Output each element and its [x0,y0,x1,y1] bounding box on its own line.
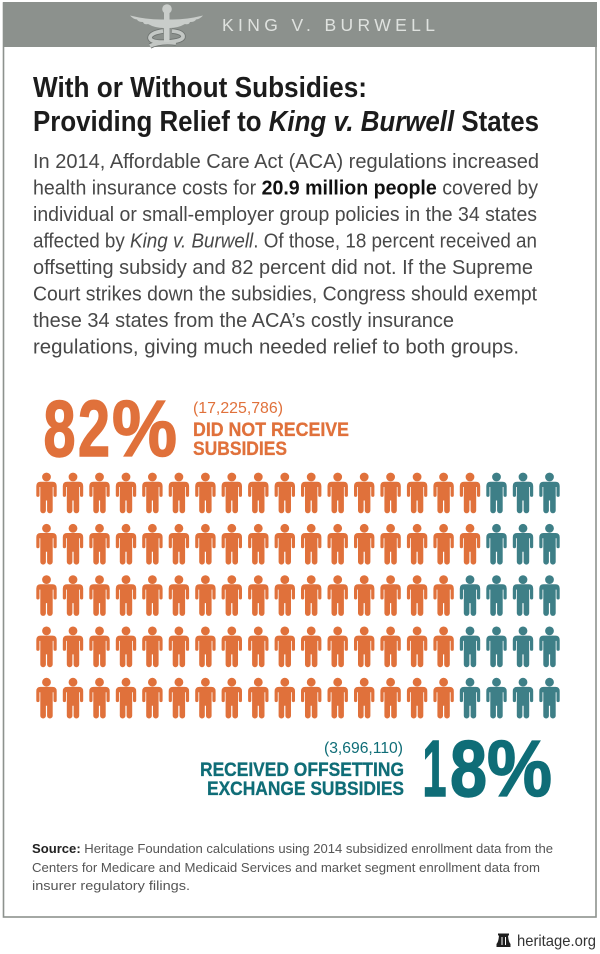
label: did not receive subsidies: SUBSIDIES [193,439,287,460]
website: heritage.org [517,933,596,950]
source note: insurer regulatory filings. [32,878,190,893]
label: received offsetting exchange subsidies [200,760,404,800]
stat: 18%: 8 [450,724,487,813]
source note: Centers for Medicare and Medicaid Services and market segment enrollment data from [32,860,540,875]
label: received offsetting exchange subsidies: EXCHANGE SUBSIDIES [207,779,404,800]
title: With or Without Subsidies: [33,72,367,104]
intro text block [33,150,539,358]
row 2 of people [36,524,560,565]
label: received offsetting exchange subsidies: RECEIVED OFFSETTING [200,760,404,781]
stat: 82%: 8 [44,384,76,473]
row 3 of people [36,575,560,616]
row 1 of people [36,473,560,513]
title: Providing Relief to King v. Burwell States [33,106,539,138]
serpent coils [150,31,183,46]
label: did not receive subsidies: DID NOT RECEIVE [193,420,349,441]
icon: liberty bell [496,934,510,947]
callout: 18 percent [200,724,552,813]
icon: caduceus [130,4,203,46]
callout: 82 percent [44,384,349,473]
stat: 82%: 2 [78,384,110,473]
footer logo [496,933,596,950]
count: 3,696,110: (3,696,110) [324,740,403,757]
stat: 82%: % [112,384,177,473]
stat: 18% [422,724,552,813]
pictogram: 100 people, 82 orange and 18 teal [36,473,560,718]
intro text block: affected by King v. Burwell. Of those, 18 percent received an [33,230,537,252]
count: 17,225,786: (17,225,786) [193,400,283,417]
intro text block: health insurance costs for 20.9 million people covered by [33,176,539,200]
label: did not receive subsidies [193,420,349,460]
intro text block: regulations, giving much needed relief to both groups. [33,336,519,358]
header title: KING V. BURWELL [222,15,435,35]
stat: 18%: 1 [422,724,446,813]
intro text block: Court strikes down the subsidies, Congress should exempt [33,282,537,306]
header bar [3,2,597,47]
intro text block: these 34 states from the ACA’s costly insurance [33,309,454,332]
stat: 18%: % [487,724,552,813]
stat: 82% [44,384,177,473]
title [33,72,539,138]
intro text block: individual or small-employer group policies in the 34 states [33,203,537,226]
row 4 of people [36,626,560,667]
row 5 of people [36,678,560,718]
intro text block: In 2014, Affordable Care Act (ACA) regulations increased [33,150,539,173]
staff and wings [130,4,203,42]
source note: Source: Heritage Foundation calculations using 2014 subsidized enrollment data from the [32,841,553,856]
intro text block: offsetting subsidy and 82 percent did not. If the Supreme [33,256,533,279]
source note [32,841,553,893]
